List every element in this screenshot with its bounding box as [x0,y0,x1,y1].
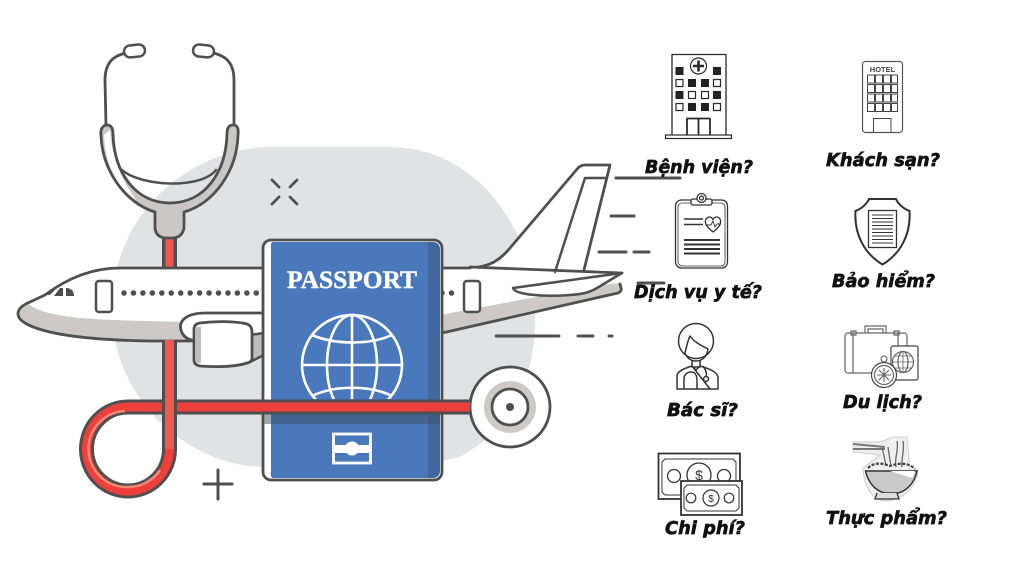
fin inner line [555,178,606,272]
front door [96,281,112,312]
fuselage [19,268,622,342]
passport spine shade [428,242,440,478]
wheel [470,367,550,447]
rear door [464,281,480,312]
grey background blob [112,147,535,468]
spring [122,170,216,184]
stethoscope headset [101,44,238,238]
globe [300,314,404,399]
wing root [180,313,270,341]
airplane [18,165,622,367]
passport cover [263,240,442,480]
tail underbody shading [440,283,622,333]
tail fin [470,165,610,274]
icon: doctor [677,324,718,389]
engine [194,322,264,367]
cabin windows [124,290,455,296]
left ear tube [105,53,126,126]
label: food: Thực phẩm? [826,507,947,529]
plus mark [204,470,232,499]
label: cost: Chi phí? [665,518,745,539]
speed lines [496,178,680,336]
icon: hotel: HOTEL [870,65,896,74]
fuselage outline [18,267,622,341]
right ear tube [213,53,234,126]
icon: banknotes [658,454,742,515]
label: travel: Du lịch? [843,392,922,413]
left ear tip [123,44,146,58]
icon: insurance shield [855,199,910,264]
label: medical services: Dịch vụ y tế? [634,282,762,303]
icon: luggage [845,326,918,388]
passport title: PASSPORT [287,267,417,294]
icon: banknotes: $ [695,467,703,483]
yoke [101,125,238,238]
icon: banknotes: $ [708,494,714,505]
label: hotel: Khách sạn? [826,150,940,171]
yoke highlight [104,130,136,200]
passport [263,240,442,480]
sparkle mark [272,180,297,204]
icon: hospital [666,54,732,138]
stabilizer [513,273,622,296]
cockpit windows [44,288,74,296]
icon: noodle bowl [853,437,918,501]
infographic canvas [16,43,947,538]
label: insurance: Bảo hiểm? [832,270,935,292]
tube shadow [264,413,440,424]
label: hospital: Bệnh viện? [645,157,753,178]
label: doctor: Bác sĩ? [667,400,738,421]
icon: medical clipboard [676,194,728,268]
stethoscope tube upper [162,236,177,270]
stethoscope tube loop [86,340,470,491]
icon: hotel [862,62,902,132]
right ear tip [192,44,215,58]
passport chip symbol [334,434,370,463]
underbody shading [19,302,190,341]
